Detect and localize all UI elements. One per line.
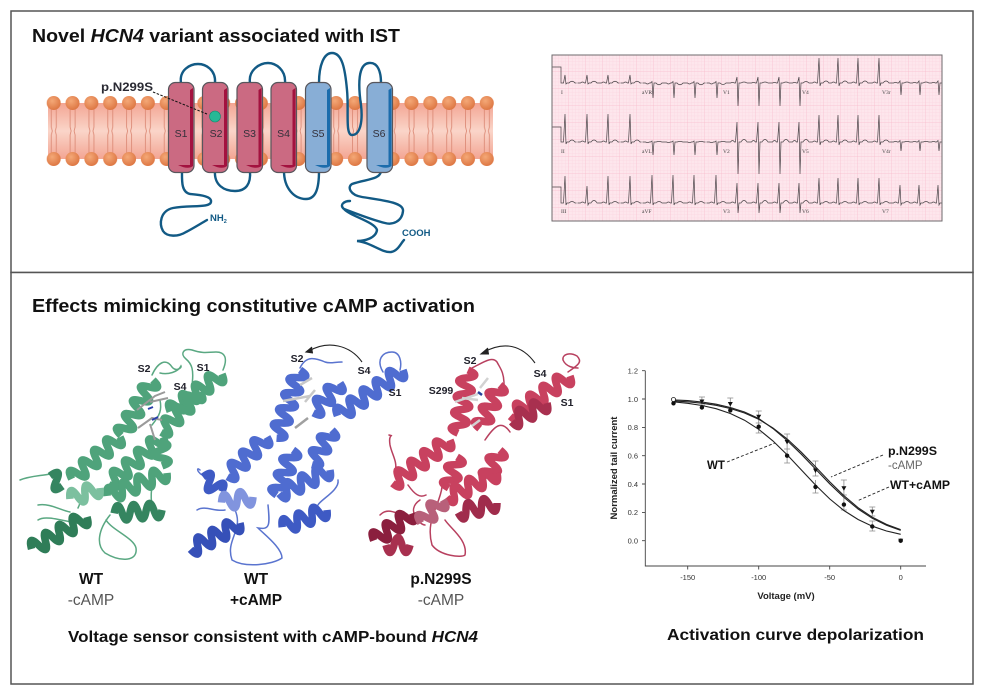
lead labels: V2 bbox=[723, 149, 730, 155]
panel: cAMP effects bbox=[11, 272, 973, 684]
lead labels: III bbox=[561, 209, 567, 215]
x tick labels: -150 bbox=[680, 573, 695, 582]
y tick labels: 1.2 bbox=[628, 366, 638, 376]
caption: activation curve: Activation curve depolarization bbox=[667, 627, 924, 644]
lead labels: V3 bbox=[723, 209, 730, 215]
residue labels: S2 bbox=[464, 355, 477, 367]
residue labels: S4 bbox=[174, 381, 187, 393]
label: WT -cAMP: -cAMP bbox=[68, 592, 114, 609]
residue labels: S1 bbox=[561, 397, 574, 409]
residue labels bbox=[138, 362, 210, 393]
residue labels: S1 bbox=[389, 387, 402, 399]
helix S5 bbox=[306, 82, 331, 172]
x tick labels: 0 bbox=[899, 573, 903, 582]
residue labels bbox=[291, 353, 402, 399]
y tick labels: 1.0 bbox=[628, 395, 638, 404]
label: p.N299S -cAMP: p.N299S bbox=[410, 571, 472, 588]
lead labels: V4r bbox=[882, 149, 891, 155]
lipid bilayer bbox=[44, 96, 495, 166]
protein: WT with cAMP bbox=[187, 345, 407, 565]
helix S4 bbox=[271, 82, 296, 172]
row 2 bbox=[552, 114, 950, 174]
side-chain sticks bbox=[455, 378, 488, 426]
row 3 bbox=[552, 175, 950, 213]
helix S1 bbox=[168, 82, 194, 172]
lead labels: V4 bbox=[802, 90, 809, 96]
caption: voltage sensor: Voltage sensor consistent with cAMP-bound HCN4 bbox=[68, 629, 478, 646]
x tick labels: -100 bbox=[751, 573, 766, 582]
helix labels: S6 bbox=[373, 128, 386, 140]
residue labels: S2 bbox=[138, 363, 151, 375]
annotation: p.N299S: p.N299S bbox=[888, 446, 937, 458]
side-chain sticks bbox=[283, 378, 315, 428]
label: WT -cAMP bbox=[68, 571, 114, 609]
activation curve chart: Normalized tail current bbox=[609, 416, 620, 519]
protein: p.N299S without cAMP bbox=[369, 346, 580, 556]
helix S3 bbox=[237, 82, 262, 172]
activation curve chart bbox=[609, 366, 950, 602]
terminus labels: COOH bbox=[402, 228, 431, 239]
lead labels: V5 bbox=[802, 149, 809, 155]
protein: WT without cAMP bbox=[20, 350, 226, 559]
residue labels bbox=[429, 355, 574, 409]
lead labels: aVL bbox=[642, 149, 652, 155]
panel: variant overview bbox=[11, 11, 973, 272]
helix labels: S4 bbox=[277, 128, 290, 140]
helix labels bbox=[175, 128, 386, 140]
conformational arrow bbox=[481, 346, 535, 363]
label: p.N299S -cAMP bbox=[410, 571, 472, 609]
annotation: WT: WT bbox=[707, 460, 725, 472]
variant marker: p.N299S bbox=[101, 80, 153, 94]
lead labels: II bbox=[561, 149, 565, 155]
residue labels: S4 bbox=[534, 368, 547, 380]
y tick labels: 0.6 bbox=[628, 452, 638, 460]
annotation: WT bbox=[707, 443, 775, 472]
fitted curves bbox=[674, 400, 901, 534]
annotation: p.N299S: -cAMP bbox=[888, 460, 923, 472]
label: WT +cAMP: WT bbox=[244, 571, 269, 588]
lead labels: aVR bbox=[642, 90, 652, 96]
side-chain sticks bbox=[137, 392, 168, 440]
x tick labels: -50 bbox=[824, 573, 835, 582]
helix S2 bbox=[202, 82, 228, 172]
axis titles: Voltage (mV) bbox=[757, 591, 815, 602]
annotation: p.N299S bbox=[831, 446, 937, 477]
y tick labels: 0.0 bbox=[628, 536, 638, 546]
axes bbox=[642, 371, 926, 570]
x tick labels bbox=[680, 573, 903, 582]
error bars bbox=[699, 397, 875, 531]
annotation: WT+cAMP bbox=[857, 480, 950, 501]
membrane topology diagram bbox=[44, 53, 495, 252]
y tick labels: 0.4 bbox=[628, 480, 638, 489]
helix labels: S3 bbox=[243, 128, 256, 140]
y tick labels: 0.8 bbox=[628, 423, 638, 432]
label: WT +cAMP: +cAMP bbox=[230, 592, 282, 609]
residue labels: S299 bbox=[429, 385, 453, 397]
helix labels: S2 bbox=[210, 128, 223, 140]
variant labels bbox=[68, 571, 472, 609]
row 1 bbox=[552, 58, 950, 106]
lead labels: aVF bbox=[642, 209, 651, 215]
terminus labels bbox=[210, 213, 431, 239]
helix labels: S1 bbox=[175, 128, 188, 140]
lead labels bbox=[561, 90, 891, 215]
y tick labels bbox=[628, 366, 638, 546]
terminus labels: NH bbox=[210, 213, 224, 224]
conformational arrow bbox=[306, 345, 362, 362]
helix labels: S5 bbox=[312, 128, 325, 140]
label: WT +cAMP bbox=[230, 571, 282, 609]
label: WT -cAMP: WT bbox=[79, 571, 104, 588]
heading: cAMP effects: Effects mimicking constitutive cAMP activation bbox=[32, 295, 475, 316]
y tick labels: 0.2 bbox=[628, 508, 638, 517]
channel loops bbox=[161, 53, 404, 252]
helix S6 bbox=[367, 82, 392, 172]
terminus labels: 2 bbox=[224, 219, 227, 225]
cAMP data points bbox=[671, 398, 903, 543]
helices S1 to S6 bbox=[168, 82, 392, 172]
lead labels: V1 bbox=[723, 90, 730, 96]
heading: novel variant: Novel HCN4 variant associated with IST bbox=[32, 25, 401, 46]
WT data points bbox=[671, 401, 903, 543]
label: p.N299S -cAMP: -cAMP bbox=[418, 592, 464, 609]
lead labels: I bbox=[561, 90, 563, 96]
lead labels: V3r bbox=[882, 90, 891, 96]
lead labels: V6 bbox=[802, 209, 809, 215]
lead labels: V7 bbox=[882, 209, 889, 215]
ECG trace bbox=[552, 55, 950, 221]
annotation: WT+cAMP: WT+cAMP bbox=[890, 480, 950, 492]
residue labels: S2 bbox=[291, 353, 304, 365]
variant marker bbox=[101, 80, 220, 122]
residue labels: S1 bbox=[197, 362, 210, 374]
residue labels: S4 bbox=[358, 365, 371, 377]
